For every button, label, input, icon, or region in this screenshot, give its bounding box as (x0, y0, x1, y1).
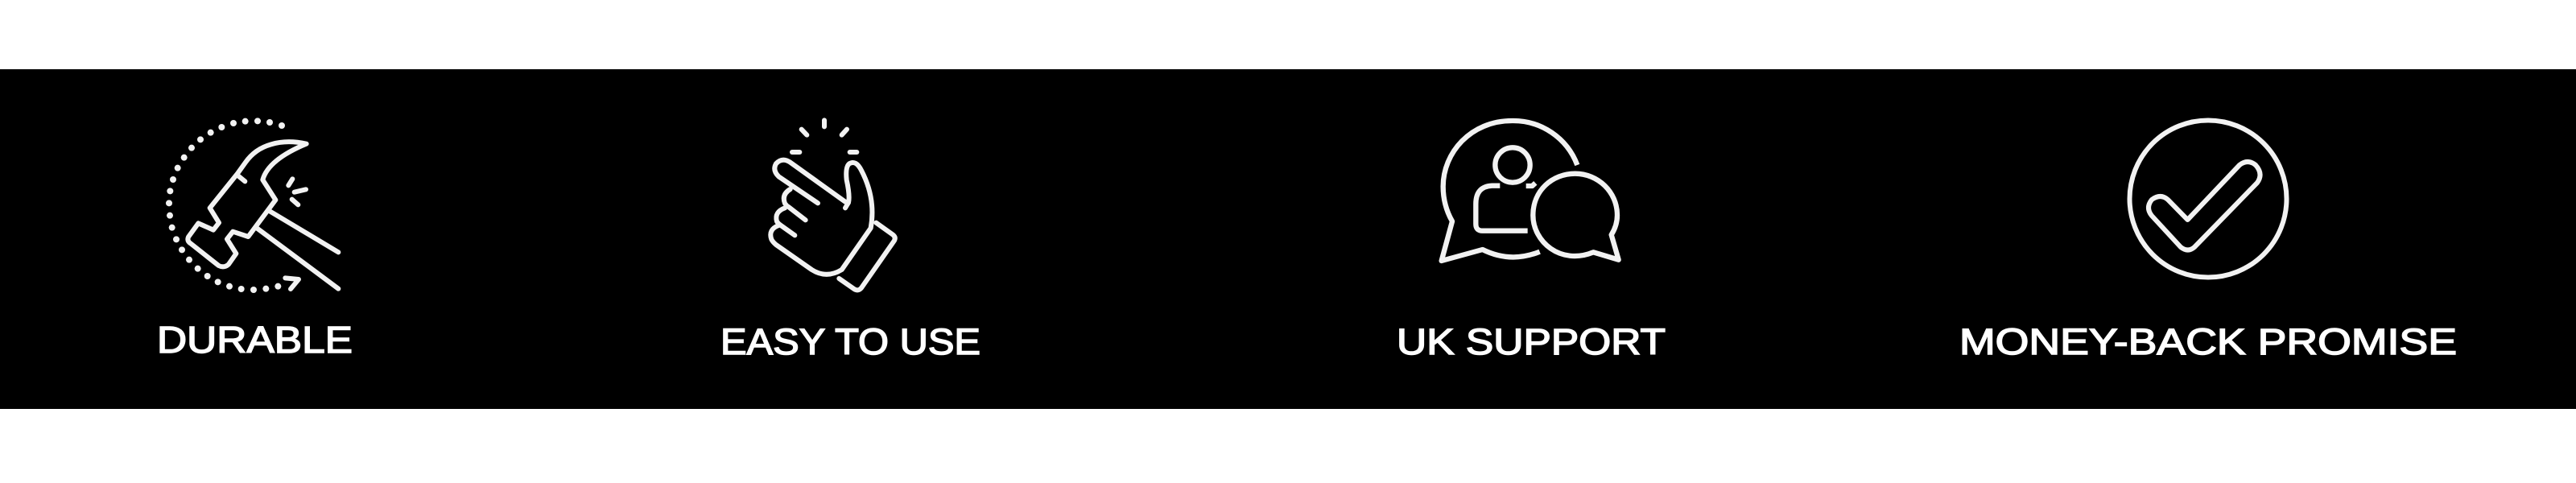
label: durable: DURABLE (157, 319, 353, 361)
item: easy to use (720, 120, 980, 362)
label: uk support: UK SUPPORT (1397, 321, 1666, 362)
black band (0, 69, 2576, 409)
item: uk support (1397, 121, 1666, 362)
label: money-back promise: MONEY-BACK PROMISE (1959, 321, 2457, 362)
icon: finger-snapping hand (770, 120, 895, 290)
item: durable (157, 118, 353, 361)
icon: speech bubbles with person (1442, 121, 1619, 261)
icon: hammer with dotted swing arrow (166, 118, 338, 293)
icon: circled check mark (2130, 121, 2286, 277)
label: easy to use: EASY TO USE (720, 321, 980, 362)
item: money-back promise (1959, 121, 2457, 362)
